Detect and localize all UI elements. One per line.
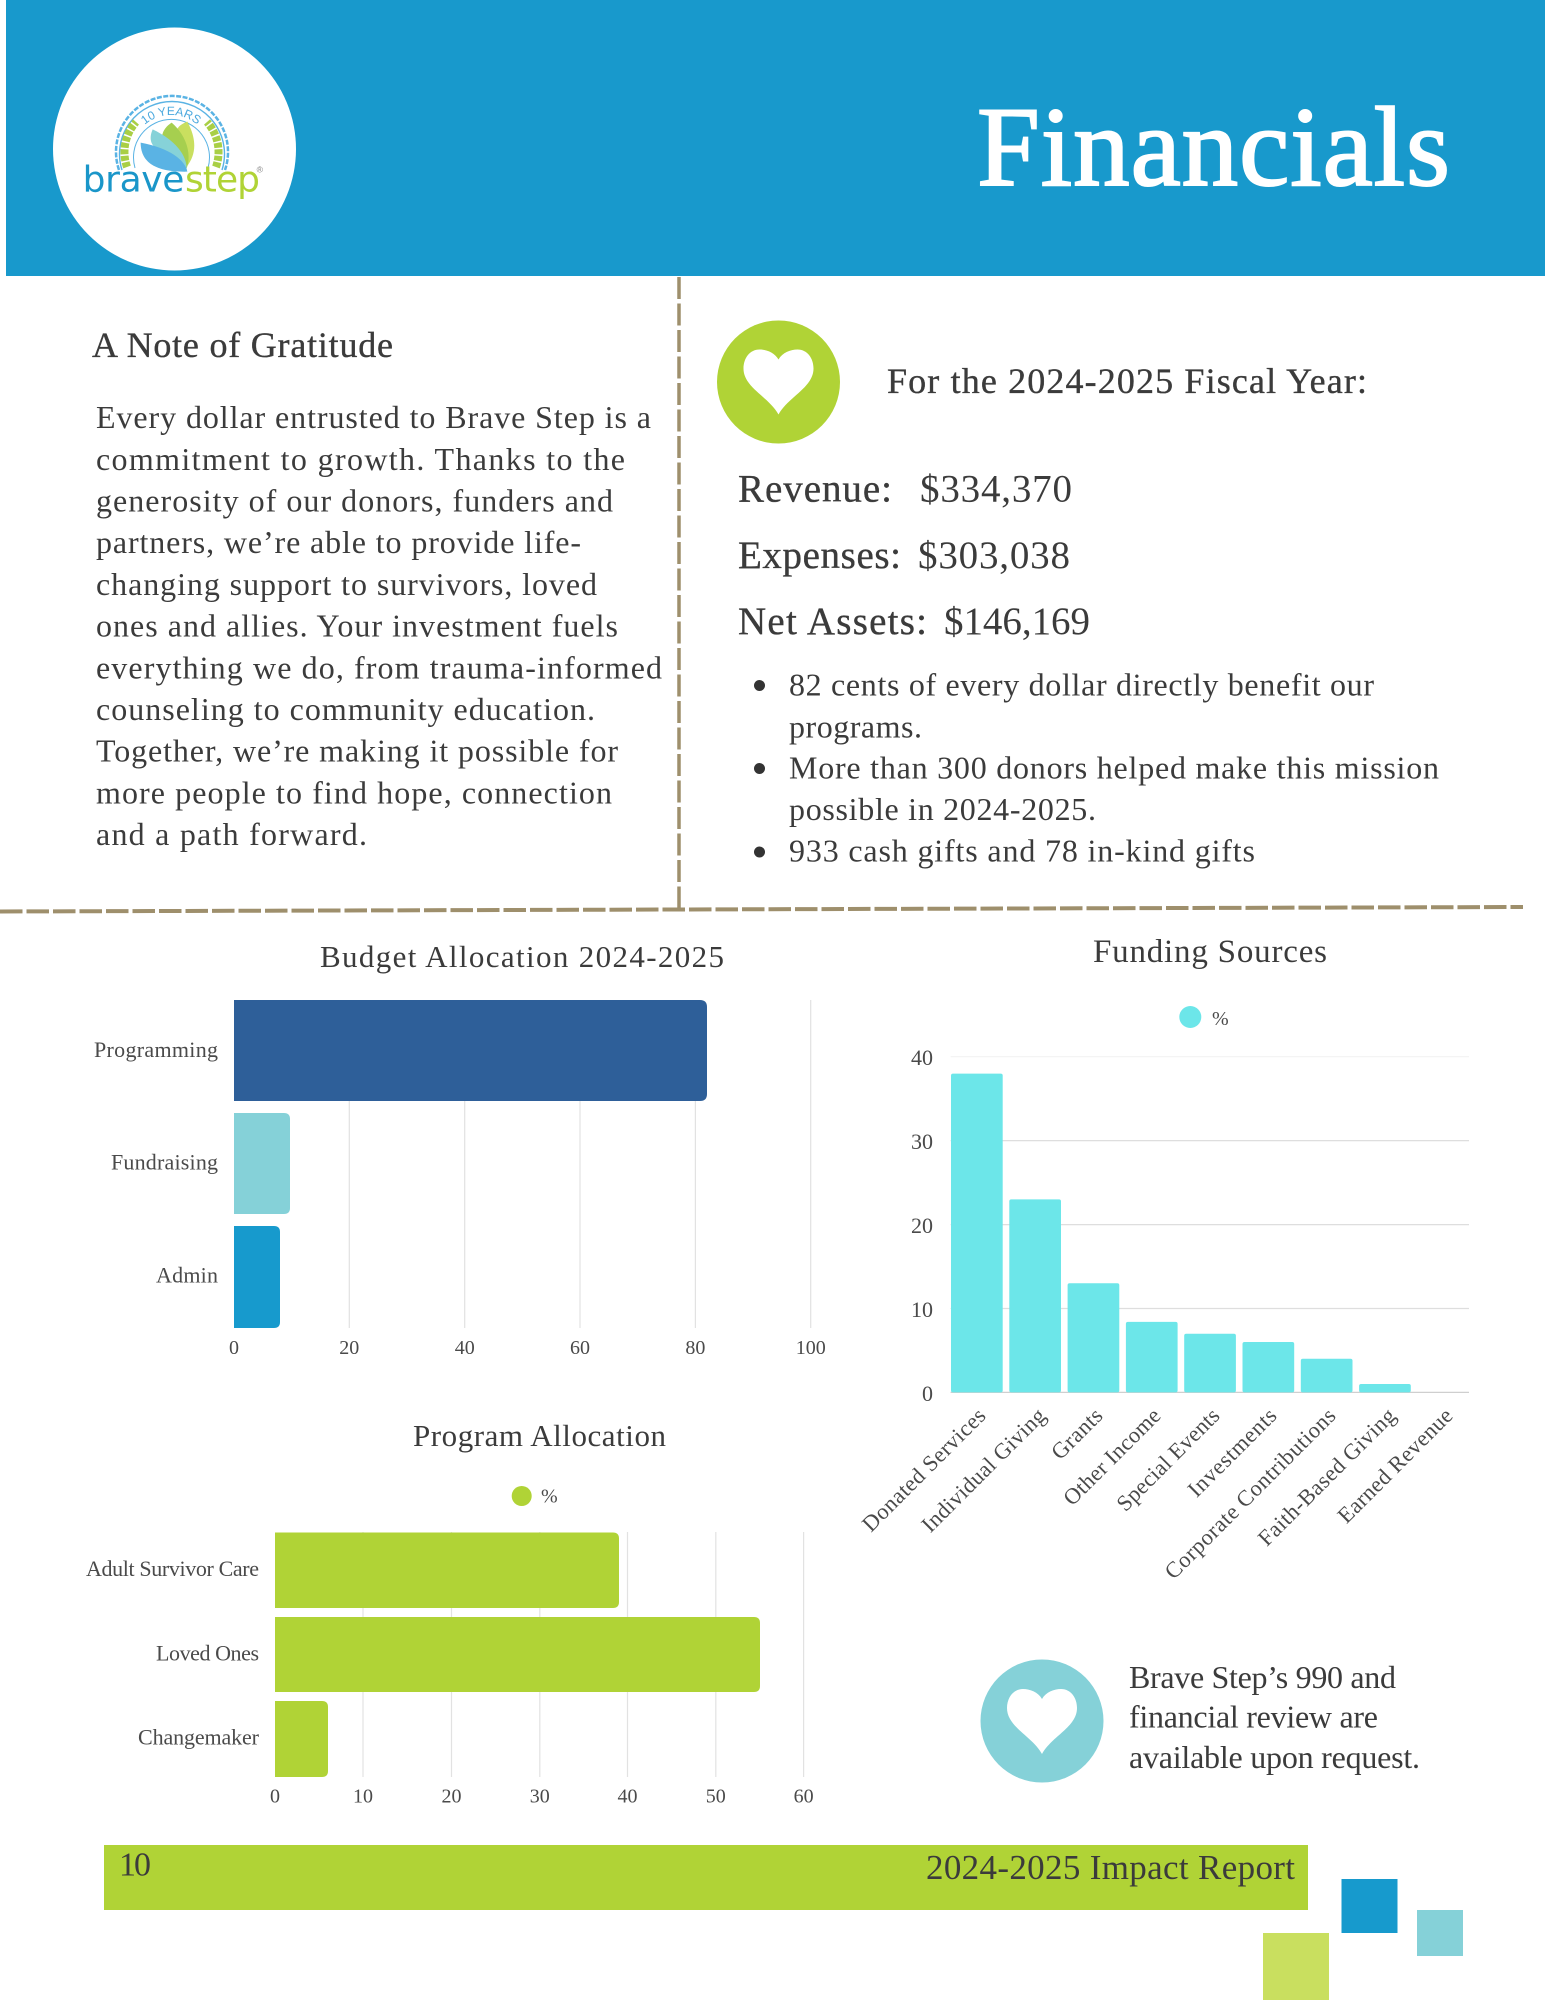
- value axis: 10: [353, 1786, 373, 1808]
- y axis: 0: [922, 1381, 933, 1406]
- x axis labels: Special Events: [1111, 1403, 1225, 1516]
- paragraph: ones and allies. Your investment fuels: [96, 608, 618, 644]
- bars: [951, 1074, 1411, 1392]
- category labels: Programming: [94, 1037, 218, 1062]
- callout: 990 availability: [980, 1659, 1420, 1782]
- category labels: Fundraising: [111, 1150, 218, 1174]
- callout text: [1129, 1659, 1420, 1775]
- chart: budget allocation: [94, 939, 826, 1359]
- value axis: 50: [706, 1786, 726, 1808]
- bullet list: 82 cents of every dollar directly benefit our: [789, 666, 1374, 702]
- chart: funding sources: [857, 934, 1469, 1584]
- value axis: 60: [794, 1786, 814, 1808]
- chart title: Program Allocation: [413, 1418, 666, 1453]
- category labels: [86, 1556, 260, 1750]
- legend: %: [1212, 1008, 1229, 1030]
- value axis: 30: [530, 1786, 550, 1808]
- bar: fundraising: [234, 1113, 290, 1214]
- net assets: $146,169: [944, 600, 1090, 643]
- bullet list: [754, 666, 1439, 868]
- panel: fiscal year summary: [717, 320, 1439, 868]
- chart title: Funding Sources: [1093, 934, 1327, 970]
- revenue: [738, 468, 1072, 510]
- bar: programming: [234, 1000, 707, 1101]
- bullet list: programs.: [789, 708, 922, 744]
- paragraph: counseling to community education.: [96, 691, 595, 727]
- header band: [6, 0, 1545, 276]
- value axis: 100: [796, 1337, 826, 1359]
- value axis: 0: [270, 1786, 280, 1808]
- x axis labels: Grants: [1046, 1403, 1108, 1464]
- callout text: available upon request.: [1129, 1739, 1420, 1775]
- category labels: Adult Survivor Care: [86, 1556, 259, 1581]
- x axis labels: Individual Giving: [916, 1403, 1051, 1537]
- x axis labels: [857, 1403, 1458, 1584]
- expenses: $303,038: [918, 534, 1070, 577]
- bars: [275, 1532, 760, 1777]
- x axis labels: Corporate Contributions: [1160, 1403, 1341, 1584]
- value axis: 40: [618, 1786, 638, 1808]
- logo leaves: ®: [257, 164, 264, 174]
- x axis labels: Earned Revenue: [1332, 1403, 1458, 1528]
- revenue: $334,370: [920, 468, 1072, 510]
- legend: [512, 1486, 558, 1508]
- chart title: Budget Allocation 2024-2025: [320, 939, 724, 974]
- value axis: 60: [570, 1337, 590, 1359]
- report name: 2024-2025 Impact Report: [926, 1848, 1295, 1887]
- y axis: 40: [911, 1045, 933, 1070]
- logo leaves: [83, 122, 264, 201]
- logo laurels: [124, 122, 219, 167]
- paragraph: more people to find hope, connection: [96, 774, 612, 810]
- x axis labels: Faith-Based Giving: [1253, 1403, 1401, 1551]
- value axis: 40: [455, 1337, 475, 1359]
- bullet list: possible in 2024-2025.: [789, 791, 1096, 827]
- logo wordmark: brave: [83, 160, 184, 201]
- paragraph: partners, we’re able to provide life-: [96, 524, 581, 560]
- category labels: Admin: [156, 1262, 218, 1288]
- decorative squares: [1263, 1879, 1463, 2000]
- paragraph: commitment to growth. Thanks to the: [96, 441, 625, 477]
- net assets: Net Assets:: [738, 600, 927, 643]
- paragraph: everything we do, from trauma-informed: [96, 650, 662, 686]
- logo leaves: step: [185, 160, 260, 201]
- paragraph: generosity of our donors, funders and: [96, 482, 613, 518]
- y axis: [911, 1045, 933, 1406]
- paragraph: Together, we’re making it possible for: [96, 732, 618, 768]
- x axis labels: Investments: [1183, 1403, 1282, 1502]
- paragraph: changing support to survivors, loved: [96, 566, 597, 602]
- dashed dividers: [0, 277, 1523, 912]
- category labels: Loved Ones: [156, 1640, 259, 1666]
- chart: program allocation: [86, 1418, 814, 1808]
- category labels: [94, 1037, 218, 1288]
- revenue: Revenue:: [738, 468, 892, 510]
- paragraph: and a path forward.: [96, 816, 367, 852]
- page number: 10: [119, 1846, 151, 1884]
- footer bar: [104, 1845, 1308, 1910]
- bullet list: More than 300 donors helped make this mission: [789, 750, 1439, 786]
- legend: %: [541, 1486, 558, 1508]
- paragraph: Every dollar entrusted to Brave Step is a: [96, 399, 651, 435]
- logo badge: [53, 28, 296, 270]
- y axis: 20: [911, 1213, 933, 1238]
- value axis: 20: [442, 1786, 462, 1808]
- expenses: Expenses:: [738, 534, 901, 577]
- page title: Financials: [977, 85, 1450, 210]
- x axis labels: Other Income: [1058, 1403, 1166, 1510]
- category labels: Changemaker: [138, 1724, 260, 1750]
- fiscal year heading: For the 2024-2025 Fiscal Year:: [887, 361, 1367, 401]
- logo ring label: 10 YEARS: [142, 106, 201, 124]
- value axis: 0: [229, 1337, 239, 1359]
- y axis: 30: [911, 1129, 933, 1154]
- callout text: Brave Step’s 990 and: [1129, 1659, 1396, 1695]
- panel: note of gratitude: [92, 325, 662, 852]
- value axis: [270, 1786, 814, 1808]
- bullet list: 933 cash gifts and 78 in-kind gifts: [789, 832, 1255, 868]
- expenses: [738, 534, 1070, 577]
- value axis: 20: [339, 1337, 359, 1359]
- value axis: 80: [685, 1337, 705, 1359]
- y axis: 10: [911, 1297, 933, 1322]
- x axis labels: Donated Services: [857, 1403, 991, 1537]
- value axis: [229, 1337, 826, 1359]
- net assets: [738, 600, 1090, 643]
- logo ring: [116, 96, 228, 170]
- heading: A Note of Gratitude: [92, 325, 393, 365]
- callout text: financial review are: [1129, 1698, 1378, 1734]
- paragraph: [96, 399, 662, 852]
- icon: green heart: [717, 320, 840, 444]
- legend: [1179, 1006, 1229, 1030]
- bar: admin: [234, 1226, 280, 1328]
- icon: teal heart: [980, 1660, 1104, 1782]
